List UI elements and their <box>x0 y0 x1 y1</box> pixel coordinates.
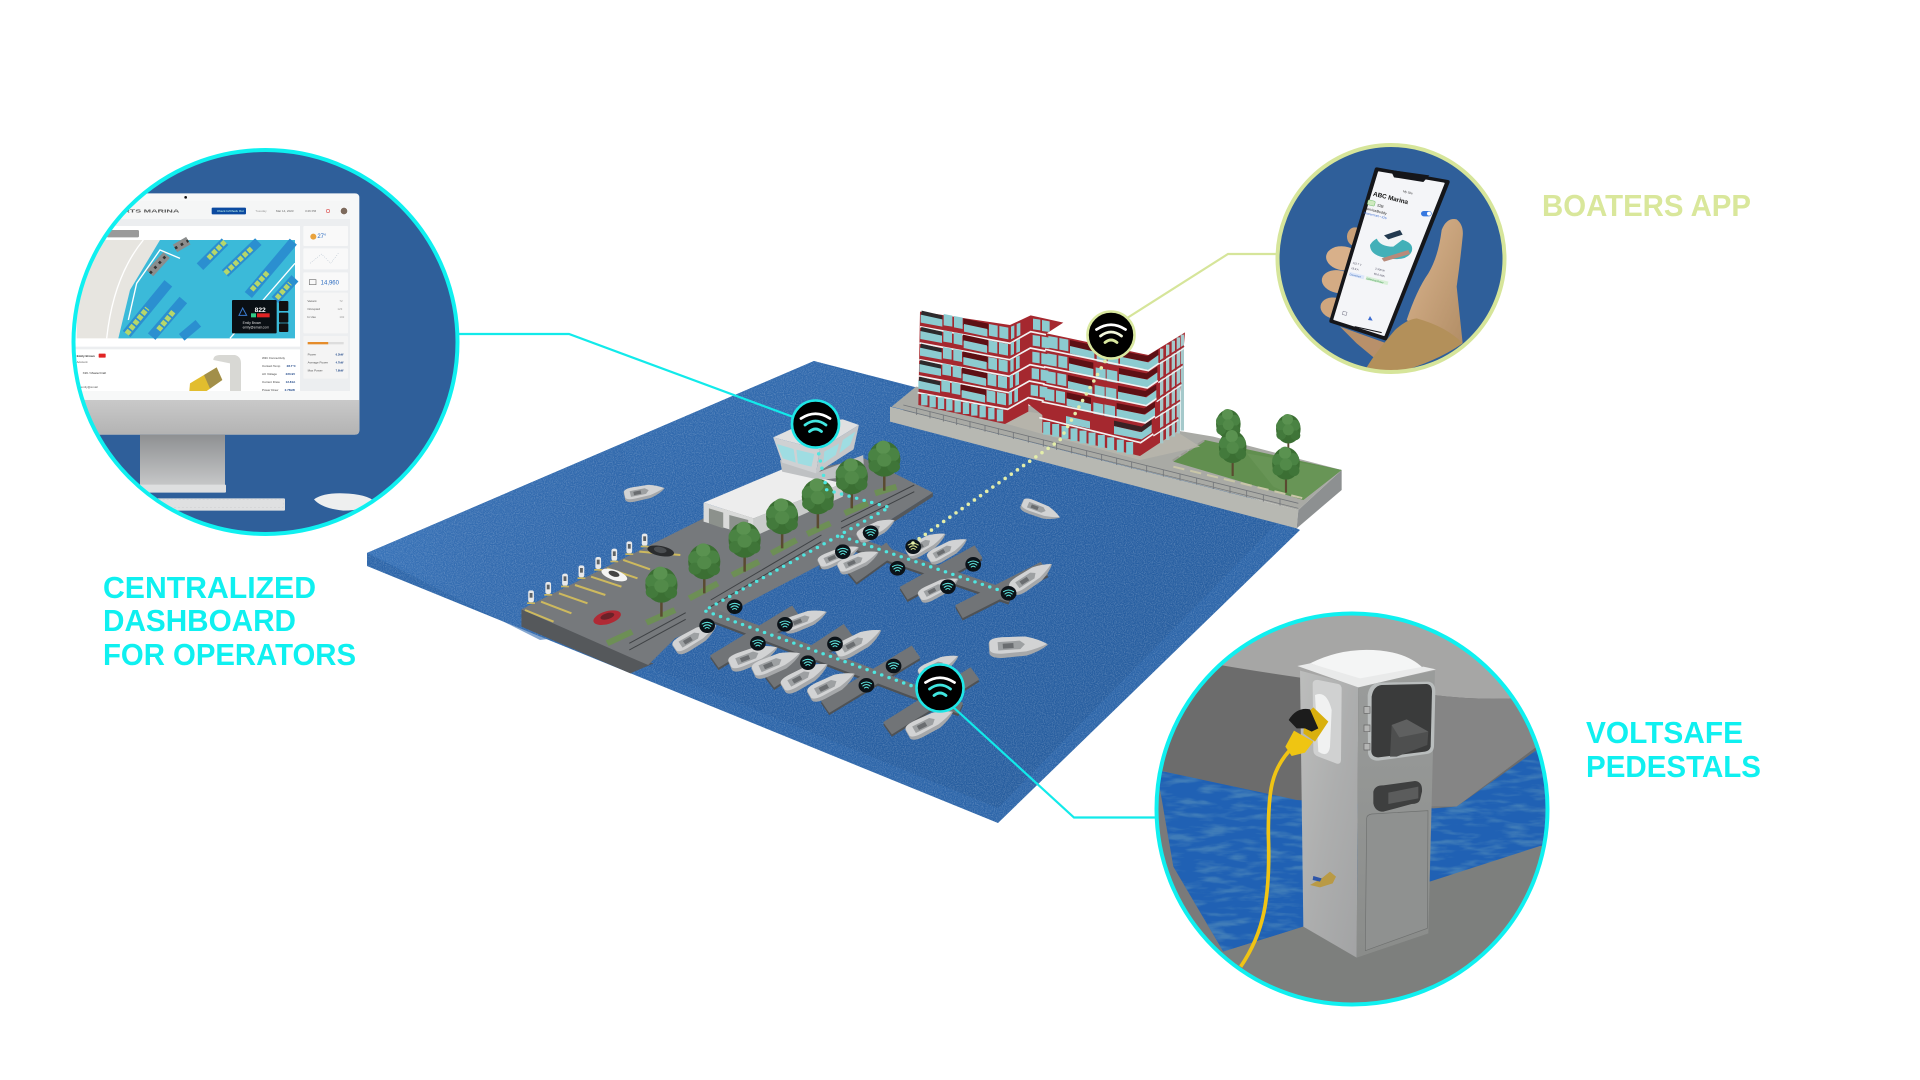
small wifi nodes <box>699 525 1016 693</box>
phone: ServiceBuddy <box>1364 206 1387 216</box>
details panel: 28.7°C <box>287 364 297 368</box>
details panel: WiFi Connectivity <box>262 356 286 360</box>
monitor stand <box>140 435 226 493</box>
phone: ABC Marina <box>1372 191 1409 206</box>
monitor: RTS MARINA <box>123 209 180 215</box>
connector: boaters app <box>1124 254 1276 320</box>
right wing ground floor <box>1047 422 1130 454</box>
phone: Delivering Power <box>1366 277 1384 284</box>
phone: 122.7 V <box>1352 261 1362 267</box>
side widgets: Average Power <box>308 361 328 365</box>
wifi icon: dock pedestal <box>916 664 964 712</box>
socket panel <box>1313 680 1342 764</box>
EV chargers <box>527 534 649 604</box>
heading: centralized dashboard for operators: FOR OPERATORS <box>103 637 356 672</box>
connector: dashboard <box>459 334 796 418</box>
details panel: Account <box>77 360 88 364</box>
lower dock <box>714 612 975 731</box>
side widgets: Power <box>308 353 316 357</box>
side widgets: In Use <box>307 315 316 319</box>
details panel: Power Draw <box>262 388 279 392</box>
panel: centralized dashboard circle <box>60 149 458 535</box>
phone: 18.8 A <box>1351 266 1359 272</box>
side widgets: 123 <box>337 307 343 311</box>
lime network route <box>913 358 1107 543</box>
parking lines <box>525 552 680 622</box>
heading: centralized dashboard for operators: DASHBOARD <box>103 603 296 638</box>
side widgets: 14,960 <box>321 281 340 287</box>
handle <box>1373 781 1422 812</box>
phone: MasterCraft • X26 <box>1363 211 1387 220</box>
heading: boaters app: BOATERS APP <box>1542 188 1751 223</box>
wifi icon: operations tower <box>792 400 839 448</box>
trees <box>645 441 900 617</box>
cars <box>591 543 675 628</box>
monitor: Check In/Check Out <box>217 209 244 213</box>
details panel: Contact Temp <box>262 364 281 368</box>
panel: voltsafe pedestal circle <box>1154 612 1550 1006</box>
details panel: emily@email <box>81 385 98 389</box>
monitor: 3:26 PM <box>305 209 317 213</box>
hand and thumb <box>1407 219 1463 343</box>
side widgets: 102 <box>339 315 345 319</box>
left wing ground floor <box>924 394 1000 421</box>
wifi icon: building <box>1088 312 1134 358</box>
connector: pedestals <box>952 706 1155 818</box>
side widgets: 7.8kW <box>336 369 344 373</box>
brass spigot <box>1310 872 1336 887</box>
map panel: Emily Brown <box>243 321 261 325</box>
side widgets: 4.7kW <box>336 361 344 365</box>
mouse <box>314 493 375 511</box>
monitor: Mar 14, 2023 <box>276 209 294 213</box>
details panel: Emily Brown <box>77 354 95 358</box>
heading: centralized dashboard for operators <box>103 570 356 672</box>
sleeve <box>1367 318 1463 373</box>
waterfront land <box>890 387 1342 528</box>
water platform <box>367 361 1300 823</box>
map panel: 822 <box>255 307 266 314</box>
phone: 22B <box>1377 203 1385 209</box>
cyan network route <box>704 447 1009 688</box>
monitor: Tuesday <box>255 209 267 213</box>
fences <box>629 485 914 650</box>
heading: voltsafe pedestals: PEDESTALS <box>1586 749 1761 784</box>
marina <box>521 419 1063 742</box>
apartment building <box>918 311 1185 456</box>
phone: 60.6 kWh <box>1373 272 1386 278</box>
phone <box>1331 169 1448 338</box>
boats <box>623 481 1063 742</box>
terminal building <box>704 419 864 537</box>
pedestal cap <box>1297 650 1436 687</box>
details panel: 220.9V <box>286 372 295 376</box>
phone: 2.306 W <box>1375 266 1386 273</box>
display box <box>1364 682 1435 761</box>
heading: centralized dashboard for operators: CENTRALIZED <box>103 570 316 605</box>
details panel: AC Voltage <box>262 372 277 376</box>
side widgets <box>303 226 348 379</box>
right wing floors <box>1039 336 1159 443</box>
map panel <box>60 226 300 347</box>
side widgets: 72 <box>339 299 343 303</box>
water <box>1157 750 1553 952</box>
left wing floors <box>918 311 1050 409</box>
heading: voltsafe pedestals: VOLTSAFE <box>1586 715 1743 750</box>
end elevation windows <box>1153 335 1184 443</box>
fingers <box>1318 227 1387 360</box>
details panel: 12.81A <box>286 380 296 384</box>
main pier <box>521 458 933 673</box>
side widgets: 27° <box>317 234 327 240</box>
map panel: emily@email.com <box>243 326 269 330</box>
yellow plug and cable <box>1241 707 1328 967</box>
boat hull background <box>1162 616 1536 808</box>
details panel <box>60 349 300 392</box>
planting strips <box>607 487 896 643</box>
concrete dock <box>1223 846 1542 952</box>
phone: My Site <box>1403 189 1414 196</box>
keyboard <box>157 498 285 511</box>
details panel: 2.76kW <box>285 388 295 392</box>
side widgets: Max Power <box>308 369 323 373</box>
side widgets: Occupied <box>307 307 320 311</box>
details panel: X26 / MasterCraft <box>83 371 106 375</box>
phone: Connected <box>1349 273 1362 279</box>
panel: boaters app circle <box>1277 144 1505 373</box>
side widgets: 6.3kW <box>336 353 344 357</box>
side widgets: Vacant <box>307 299 317 303</box>
pedestal body <box>1300 671 1435 958</box>
details panel: Current Draw <box>262 380 281 384</box>
monitor <box>60 193 359 435</box>
waterfront fence and trees <box>903 405 1301 508</box>
heading: voltsafe pedestals <box>1586 715 1761 784</box>
upper dock <box>841 538 1045 614</box>
